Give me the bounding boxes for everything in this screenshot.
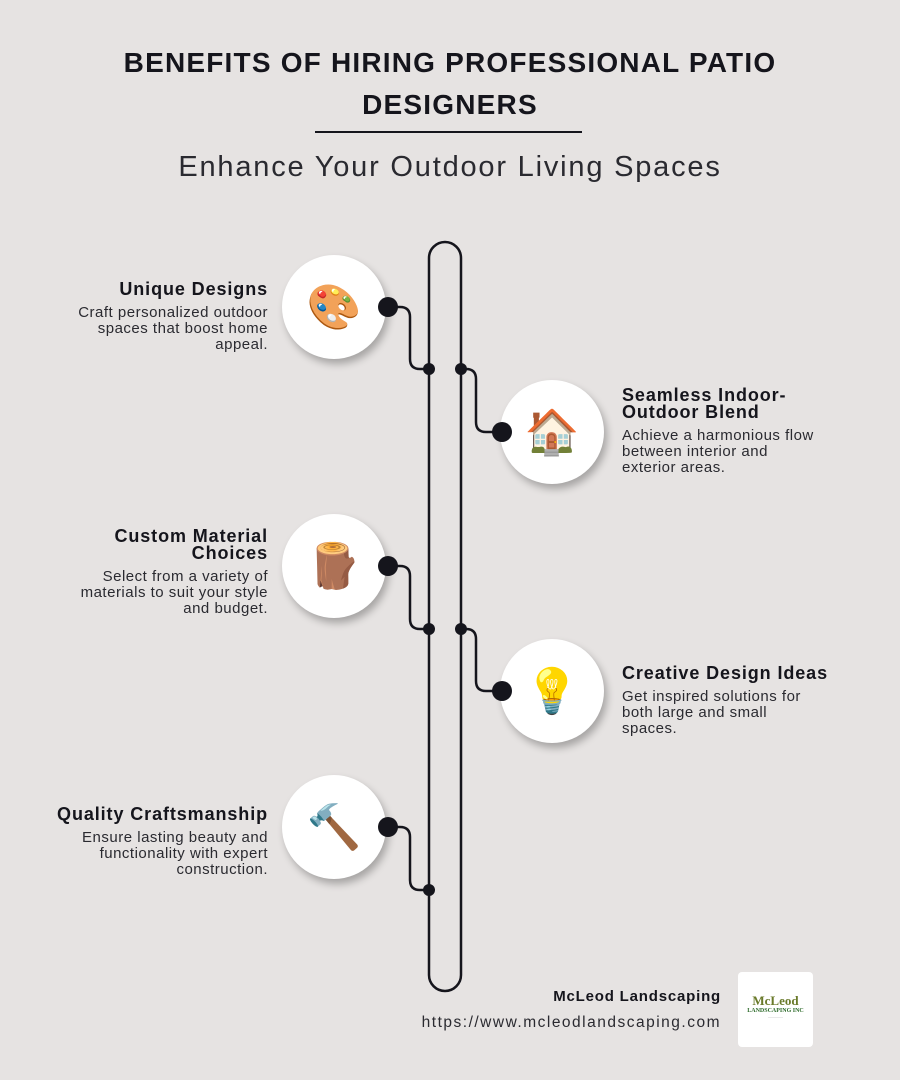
title: BENEFITS OF HIRING PROFESSIONAL PATIO xyxy=(124,47,776,78)
logo: LANDSCAPING INC xyxy=(747,1008,804,1014)
subtitle: Enhance Your Outdoor Living Spaces xyxy=(178,151,722,183)
title underline xyxy=(315,131,582,133)
dot: unique designs xyxy=(378,297,398,317)
text: craftsmanship xyxy=(57,804,268,878)
icon: wood: 🪵 xyxy=(307,541,361,592)
icon: palette xyxy=(282,255,386,359)
text: materials: Custom Material xyxy=(114,526,268,546)
footer: company: https://www.mcleodlandscaping.com xyxy=(422,1014,721,1031)
title xyxy=(124,47,776,120)
dot: creative xyxy=(492,681,512,701)
text: materials: Select from a variety of materials to suit your style and budget. xyxy=(81,568,268,617)
text: indoor-outdoor: Achieve a harmonious flow between interior and exterior areas. xyxy=(622,427,814,476)
icon: hammer xyxy=(282,775,386,879)
dot: materials xyxy=(378,556,398,576)
text: creative: Creative Design Ideas xyxy=(622,663,828,683)
footer: company xyxy=(422,988,721,1031)
text: materials: Choices xyxy=(192,543,268,563)
dot: craftsmanship xyxy=(378,817,398,837)
text: creative: Get inspired solutions for both large and small spaces. xyxy=(622,688,801,737)
text: unique designs xyxy=(78,279,268,353)
logo: ————— xyxy=(768,1015,783,1019)
text: indoor-outdoor: Outdoor Blend xyxy=(622,402,760,422)
icon: palette: 🎨 xyxy=(307,282,361,333)
text: indoor-outdoor xyxy=(622,385,814,476)
text: unique designs: Craft personalized outdoor spaces that boost home appeal. xyxy=(78,304,268,353)
logo xyxy=(738,972,813,1047)
footer: company: McLeod Landscaping xyxy=(553,988,721,1005)
icon: house xyxy=(500,380,604,484)
text: materials xyxy=(81,526,268,617)
text: craftsmanship: Quality Craftsmanship xyxy=(57,804,268,824)
text: unique designs: Unique Designs xyxy=(119,279,268,299)
dot: indoor-outdoor xyxy=(492,422,512,442)
title: DESIGNERS xyxy=(362,89,538,120)
text: creative xyxy=(622,663,828,737)
icon: light bulb: 💡 xyxy=(525,666,579,717)
icon: wood xyxy=(282,514,386,618)
icon: house: 🏠 xyxy=(525,407,579,458)
text: craftsmanship: Ensure lasting beauty and functionality with expert construction. xyxy=(82,829,268,878)
icon: hammer: 🔨 xyxy=(307,802,361,853)
text: indoor-outdoor: Seamless Indoor- xyxy=(622,385,786,405)
logo: McLeod xyxy=(752,993,799,1008)
icon: light bulb xyxy=(500,639,604,743)
